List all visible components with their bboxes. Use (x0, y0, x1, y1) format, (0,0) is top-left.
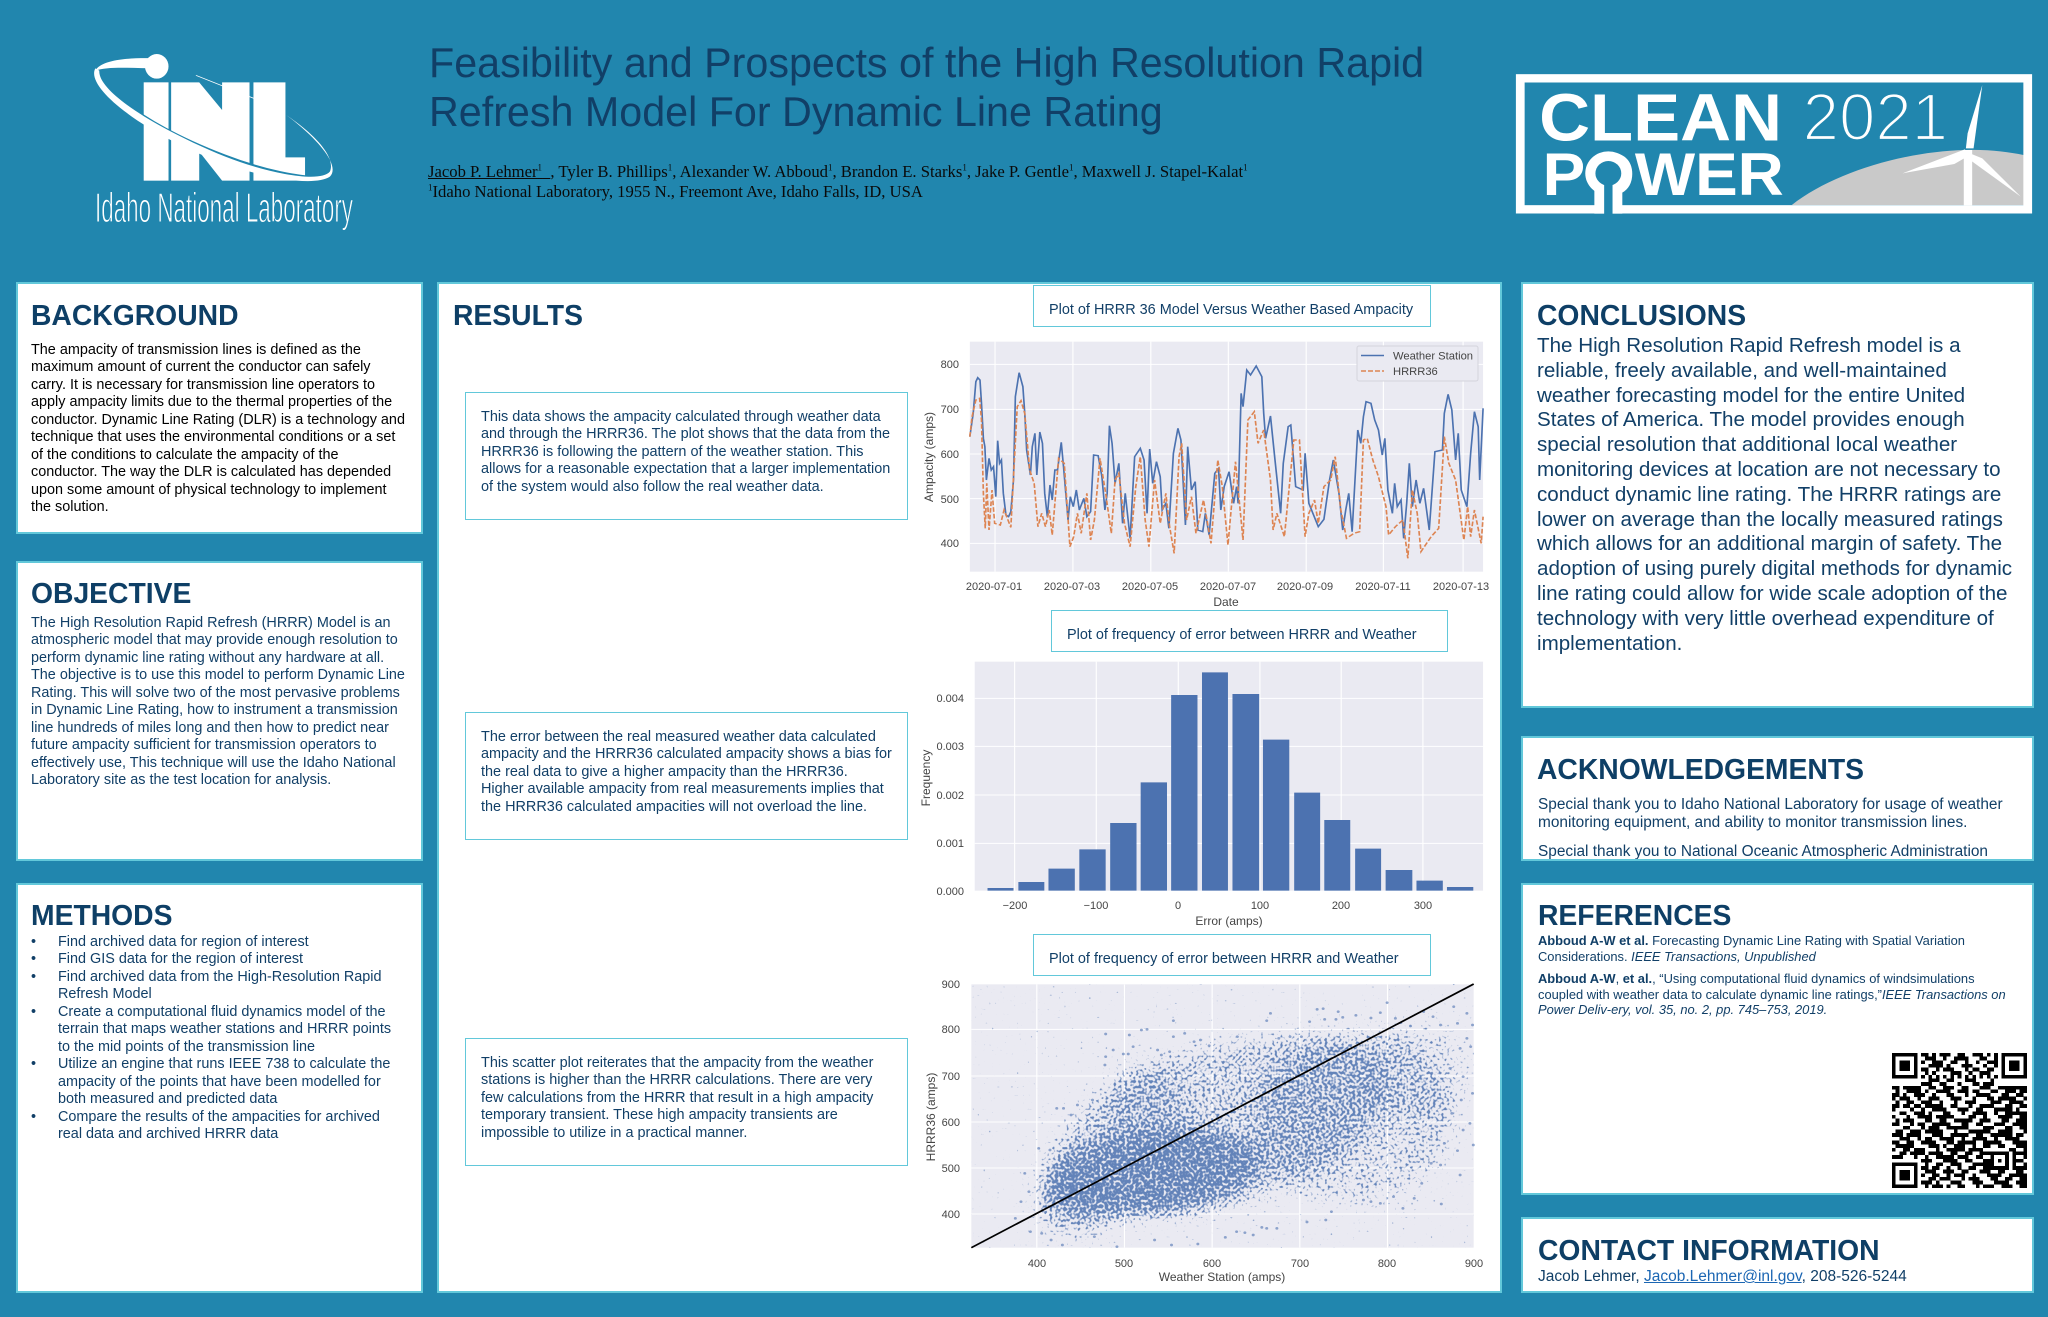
QR code (1892, 1053, 2027, 1188)
text: background (31, 342, 405, 515)
text: background: conductor. The way the DLR is calculated has depended (31, 464, 391, 480)
panel: references (1521, 883, 2034, 1195)
text: methods list: Utilize an engine that runs IEEE 738 to calculate the (58, 1056, 390, 1072)
line chart: ampacity over time: 2020-07-03 (1044, 581, 1100, 593)
text: objective: Laboratory site as the test location for analysis. (31, 772, 331, 788)
text: background: The ampacity of transmission lines is defined as the (31, 342, 361, 358)
chart title 1 (1033, 285, 1431, 327)
chart title 1: Plot of HRRR 36 Model Versus Weather Based Ampacity (1049, 302, 1413, 318)
heading: contact information: CONTACT INFORMATION (1538, 1234, 1880, 1266)
logo: Clean Power 2021: CLEAN (1539, 81, 1782, 155)
histogram: error frequency: 0 (1175, 900, 1181, 912)
text: conclusions: technology with very little overhead expenditure of (1537, 607, 1994, 630)
text: conclusions: monitoring devices at location are not necessary to (1537, 458, 2001, 481)
text: methods list: Create a computational fluid dynamics model of the (58, 1004, 386, 1020)
scatter plot: weather station vs HRRR36: Weather Station (amps) (1159, 1270, 1285, 1284)
text: objective: perform dynamic line rating without any hardware at all. (31, 650, 384, 666)
line chart: ampacity over time: 600 (941, 449, 959, 461)
line chart: ampacity over time: HRRR36 (1393, 366, 1438, 378)
histogram: error frequency: 300 (1414, 900, 1432, 912)
text: methods list: Find archived data from the High-Resolution Rapid (58, 969, 382, 985)
callout: results text 3: few calculations from the HRRR that result in a high ampacity (481, 1090, 873, 1106)
title: Refresh Model For Dynamic Line Rating (429, 89, 1163, 135)
scatter plot: weather station vs HRRR36: 400 (942, 1209, 960, 1221)
scatter plot: weather station vs HRRR36: 900 (1465, 1258, 1483, 1270)
histogram: error frequency: 100 (1251, 900, 1269, 912)
text: background: apply ampacity limits due to the thermal properties of the (31, 394, 392, 410)
histogram: error frequency: 0.002 (936, 790, 964, 802)
histogram: error frequency: 0.003 (936, 741, 964, 753)
authors and affiliation (428, 162, 1248, 201)
callout: results text 3: temporary transient. These high ampacity transients are (481, 1107, 838, 1123)
text: background: technique that uses the environmental conditions or a set (31, 429, 395, 445)
heading: background: BACKGROUND (31, 299, 239, 331)
line chart: ampacity over time: Weather Station (1393, 350, 1473, 362)
line chart: ampacity over time: 2020-07-07 (1200, 581, 1256, 593)
heading: acknowledgements: ACKNOWLEDGEMENTS (1537, 753, 1864, 785)
bullets: methods: • (31, 934, 36, 950)
text: conclusions: implementation. (1537, 632, 1682, 655)
text: references: Power Deliv-ery, vol. 35, no. 2, pp. 745–753, 2019. (1538, 1002, 1827, 1017)
text: methods list: ampacity of the points that have been modelled for (58, 1074, 381, 1090)
logo: Clean Power 2021: POWER (1543, 141, 1784, 209)
authors and affiliation: 1Idaho National Laboratory, 1955 N., Freemont Ave, Idaho Falls, ID, USA (428, 182, 923, 201)
line chart: ampacity over time: 800 (941, 359, 959, 371)
callout: results text 1: HRRR36 is following the pattern of the weather station. This (481, 444, 864, 460)
scatter plot: weather station vs HRRR36: 800 (1378, 1258, 1396, 1270)
line chart: ampacity over time: 2020-07-09 (1277, 581, 1333, 593)
text: methods list: Refresh Model (58, 986, 152, 1002)
scatter plot: weather station vs HRRR36: 700 (1291, 1258, 1309, 1270)
callout: results text 2: the HRRR36 calculated ampacities will not overload the line. (481, 799, 867, 815)
text: conclusions: The High Resolution Rapid Refresh model is a (1537, 334, 1961, 357)
histogram: error frequency: 0.004 (936, 693, 964, 705)
scatter plot: weather station vs HRRR36: 400 (1028, 1258, 1046, 1270)
text: acknowledgements: Special thank you to Idaho National Laboratory for usage of weather (1538, 796, 2003, 813)
callout: results text 3: This scatter plot reiterates that the ampacity from the weather (481, 1055, 873, 1071)
histogram: error frequency: −200 (1003, 900, 1027, 912)
text: methods list: to the mid points of the transmission line (58, 1039, 315, 1055)
scatter plot: weather station vs HRRR36: 800 (942, 1024, 960, 1036)
text: conclusions: line rating could allow for wide scale adoption of the (1537, 582, 2008, 605)
text: acknowledgements: monitoring equipment, and ability to monitor transmission lines. (1538, 814, 1967, 831)
text: background: carry. It is necessary for transmission line operators to (31, 377, 375, 393)
bullets: methods: • (31, 951, 36, 967)
panel: contact information (1521, 1217, 2034, 1293)
line chart: ampacity over time: Date (1213, 595, 1239, 609)
text: methods list: real data and archived HRRR data (58, 1126, 278, 1142)
text: contact details: Jacob Lehmer, Jacob.Lehmer@inl.gov, 208-526-5244 (1538, 1268, 1907, 1285)
histogram: error frequency: 0.000 (936, 886, 964, 898)
text: conclusions: lower on average than the locally measured ratings (1537, 508, 2003, 531)
line chart: ampacity over time (922, 342, 1489, 609)
text: objective: The High Resolution Rapid Refresh (HRRR) Model is an (31, 615, 391, 631)
callout: results text 2 (465, 712, 908, 840)
callout: results text 3 (465, 1038, 908, 1166)
callout: results text 2: Higher available ampacity from real measurements implies that (481, 781, 884, 797)
heading: conclusions: CONCLUSIONS (1537, 299, 1746, 331)
panel: results (437, 282, 1502, 1293)
line chart: ampacity over time: 500 (941, 494, 959, 506)
text: conclusions: which allows for an additional margin of safety. The (1537, 532, 2002, 555)
bullets: methods: • (31, 1056, 36, 1072)
authors and affiliation: Jacob P. Lehmer1 , Tyler B. Phillips1, Alexander W. Abboud1, Brandon E. Starks1, Jake P. Gentle1, Maxwell J. Stapel-Kalat1 (428, 162, 1248, 181)
scatter plot: weather station vs HRRR36: 500 (1115, 1258, 1133, 1270)
line chart: ampacity over time: 400 (941, 538, 959, 550)
text: background: of the conditions to calculate the ampacity of the (31, 447, 339, 463)
scatter plot: weather station vs HRRR36: HRRR36 (amps) (924, 1073, 938, 1161)
logo: Clean Power 2021 (1516, 74, 2032, 214)
text: conclusions: reliable, freely available, and well-maintained (1537, 359, 1947, 382)
text: methods list (58, 934, 391, 1142)
histogram: error frequency (919, 662, 1483, 928)
heading: methods: METHODS (31, 899, 172, 931)
scatter plot: weather station vs HRRR36 (924, 979, 1483, 1284)
text: background: conductor. Dynamic Line Rating (DLR) is a technology and (31, 412, 405, 428)
text: objective: in Dynamic Line Rating, how to instrument a transmission (31, 702, 398, 718)
title (429, 40, 1424, 135)
scatter plot: weather station vs HRRR36: 900 (942, 979, 960, 991)
text: objective: effectively use, This technique will use the Idaho National (31, 755, 396, 771)
text: background: maximum amount of current the conductor can safely (31, 359, 371, 375)
text: references (1538, 933, 2006, 1017)
histogram: error frequency: −100 (1084, 900, 1108, 912)
text: methods list: both measured and predicted data (58, 1091, 277, 1107)
panel: methods (16, 883, 423, 1293)
histogram: error frequency: 0.001 (936, 838, 964, 850)
callout: results text 1: allows for a reasonable expectation that a larger implementation (481, 461, 890, 477)
bullets: methods: • (31, 969, 36, 985)
bullets: methods: • (31, 1004, 36, 1020)
text: conclusions: weather forecasting model for the entire United (1537, 384, 1965, 407)
line chart: ampacity over time: 2020-07-11 (1355, 581, 1411, 593)
text: objective: line hundreds of miles long and then how to predict near (31, 720, 389, 736)
text: methods list: terrain that maps weather stations and HRRR points (58, 1021, 391, 1037)
callout: results text 1: of the system would also follow the real weather data. (481, 479, 824, 495)
bullets: methods: • (31, 1109, 36, 1125)
text: references: Considerations. IEEE Transactions, Unpublished (1538, 949, 1816, 964)
text: conclusions (1537, 334, 2012, 655)
text: conclusions: adoption of using purely digital methods for dynamic (1537, 557, 2012, 580)
callout: results text 2: ampacity and the HRRR36 calculated ampacity shows a bias for (481, 746, 892, 762)
text: background: upon some amount of physical technology to implement (31, 482, 387, 498)
text: objective: future ampacity sufficient for transmission operators to (31, 737, 377, 753)
text: objective: Rating. This will solve two of the most pervasive problems (31, 685, 400, 701)
chart title 2: Plot of frequency of error between HRRR and Weather (1067, 627, 1417, 643)
text: references: coupled with weather data to calculate dynamic line ratings,”IEEE Transactions on (1538, 987, 2006, 1002)
scatter plot: weather station vs HRRR36: 500 (942, 1163, 960, 1175)
text: references: Abboud A-W et al. Forecasting Dynamic Line Rating with Spatial Variation (1538, 933, 1965, 948)
line chart: ampacity over time: 2020-07-05 (1122, 581, 1178, 593)
scatter plot: weather station vs HRRR36: 600 (1203, 1258, 1221, 1270)
histogram: error frequency: Error (amps) (1195, 914, 1263, 928)
panel: conclusions (1521, 282, 2034, 708)
text: background: the solution. (31, 499, 109, 515)
callout: results text 1: and through the HRRR36. The plot shows that the data from the (481, 426, 890, 442)
text: objective (31, 615, 405, 788)
text: references: Abboud A-W, et al., “Using computational fluid dynamics of windsimulations (1538, 971, 1975, 986)
callout: results text 2: The error between the real measured weather data calculated (481, 729, 876, 745)
chart title 2 (1051, 610, 1448, 652)
text: objective: atmospheric model that may provide enough resolution to (31, 632, 398, 648)
callout: results text 2: the real data to give a higher ampacity than the HRRR36. (481, 764, 848, 780)
chart title 3: Plot of frequency of error between HRRR and Weather (1049, 951, 1399, 967)
scatter plot: weather station vs HRRR36: 600 (942, 1117, 960, 1129)
logo: Clean Power 2021: 2021 (1803, 80, 1948, 155)
logo: Idaho National Laboratory (94, 54, 353, 231)
title: Feasibility and Prospects of the High Resolution Rapid (429, 40, 1424, 86)
callout: results text 3: stations is higher than the HRRR calculations. There are very (481, 1072, 872, 1088)
panel: acknowledgements (1521, 736, 2034, 861)
text: conclusions: conduct dynamic line rating. The HRRR ratings are (1537, 483, 2001, 506)
panel: background (16, 282, 423, 534)
histogram: error frequency: Frequency (919, 750, 933, 806)
text: methods list: Compare the results of the ampacities for archived (58, 1109, 380, 1125)
text: acknowledgements (1538, 796, 2003, 860)
text: acknowledgements: Special thank you to National Oceanic Atmospheric Administration (1538, 843, 1988, 860)
text: objective: The objective is to use this model to perform Dynamic Line (31, 667, 405, 683)
text: methods list: Find GIS data for the region of interest (58, 951, 303, 967)
heading: results: RESULTS (453, 299, 583, 331)
heading: objective: OBJECTIVE (31, 577, 191, 609)
panel: objective (16, 561, 423, 861)
chart title 3 (1033, 934, 1431, 976)
callout: results text 1 (465, 392, 908, 520)
text: conclusions: States of America. The model provides enough (1537, 408, 1965, 431)
histogram: error frequency: 200 (1332, 900, 1350, 912)
scatter plot: weather station vs HRRR36: 700 (942, 1071, 960, 1083)
text: conclusions: special resolution that additional local weather (1537, 433, 1957, 456)
line chart: ampacity over time: 700 (941, 404, 959, 416)
callout: results text 1: This data shows the ampacity calculated through weather data (481, 409, 881, 425)
line chart: ampacity over time: 2020-07-01 (966, 581, 1022, 593)
text: methods list: Find archived data for region of interest (58, 934, 309, 950)
heading: references: REFERENCES (1538, 899, 1731, 931)
line chart: ampacity over time: Ampacity (amps) (922, 412, 936, 502)
callout: results text 3: impossible to utilize in a practical manner. (481, 1125, 747, 1141)
bullets: methods (31, 934, 36, 1125)
line chart: ampacity over time: 2020-07-13 (1433, 581, 1489, 593)
